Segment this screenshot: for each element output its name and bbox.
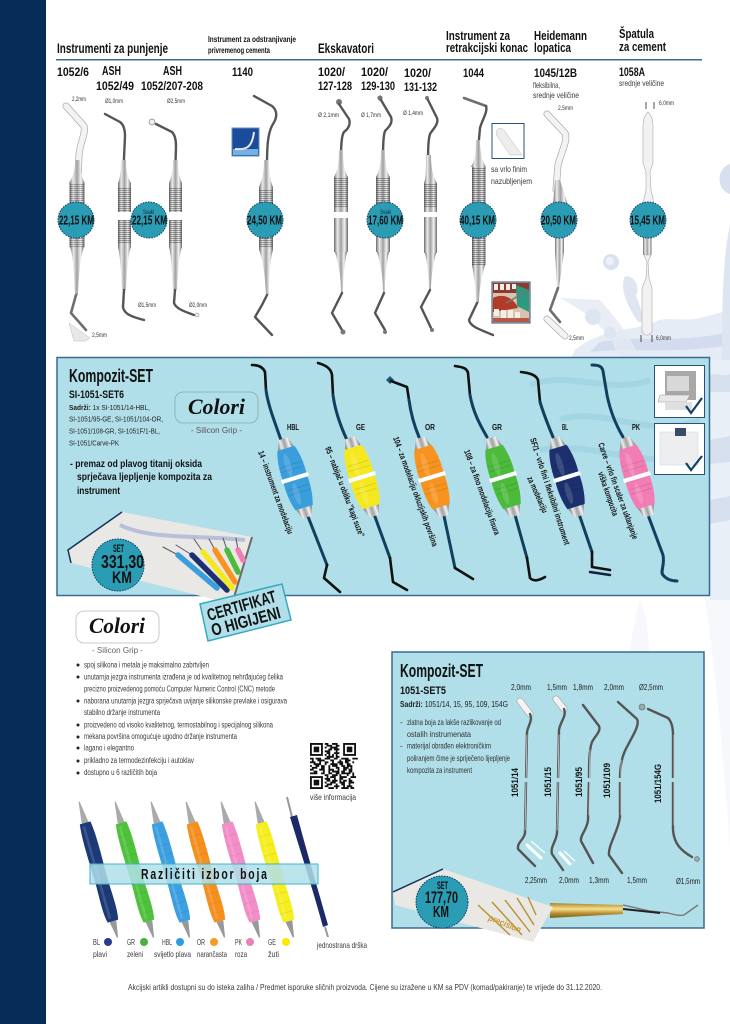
product codes: 127-128 bbox=[318, 79, 352, 93]
dimension labels: 6,0mm bbox=[656, 336, 671, 342]
instrument 1045/12B bbox=[547, 114, 568, 336]
header: Instrument za retrakcijski konac: retrakcijski konac bbox=[446, 40, 528, 55]
inset: dental photo bbox=[492, 282, 530, 323]
dimension labels: Ø2,5mm bbox=[167, 99, 185, 105]
set price badge 177,70 KM bbox=[416, 876, 468, 928]
tip sizes bbox=[511, 682, 700, 886]
colour legend bbox=[93, 937, 367, 959]
colour legend: PK bbox=[235, 937, 242, 947]
price badge 40,15 KM: 40,15 KM bbox=[460, 214, 495, 228]
header: Instrument za odstranjivanje privremenog cementa: Instrument za odstranjivanje bbox=[208, 35, 296, 44]
colour legend: OR bbox=[197, 937, 205, 947]
vertical codes: 1051/109 bbox=[602, 763, 613, 798]
instrument 1051/109 bbox=[609, 702, 638, 873]
product codes: 1052/207-208 bbox=[141, 79, 203, 93]
feature list: mekana površina omogućuje ugodno držanje instrumenta bbox=[84, 732, 237, 741]
dimension labels: Ø 1,7mm bbox=[361, 113, 381, 119]
price badge 15,45 KM: 15,45 KM bbox=[630, 214, 665, 228]
header: Instrument za retrakcijski konac: Instrument za bbox=[446, 28, 511, 43]
rotated captions bbox=[256, 435, 640, 548]
product codes: 131-132 bbox=[404, 80, 437, 94]
feature list: stabilno držanje instrumenta bbox=[84, 708, 160, 717]
price badge 15,45 KM bbox=[630, 202, 666, 238]
vertical codes: 1051/154G bbox=[653, 764, 664, 803]
set price badge 331,30 KM: SET bbox=[113, 543, 124, 555]
Colori logo lower: - Silicon Grip - bbox=[92, 646, 143, 655]
price badge 24,50 KM bbox=[247, 202, 283, 238]
notes: kompozita za instrument bbox=[407, 766, 473, 775]
set price badge 331,30 KM: KM bbox=[112, 568, 132, 587]
instrument 1058A spatula bbox=[642, 112, 654, 335]
coating note: - premaz od plavog titanij oksida bbox=[70, 458, 202, 470]
contents bbox=[69, 403, 163, 448]
instrument 1052/207-208 bbox=[149, 119, 199, 317]
header: Špatula za cement: za cement bbox=[619, 39, 666, 54]
instrument OR bbox=[387, 377, 473, 579]
vertical codes: 1051/95 bbox=[574, 766, 585, 797]
contents: SI-1051/95-GE, SI-1051/104-OR, bbox=[69, 414, 163, 424]
gold instrument bbox=[550, 903, 698, 918]
text: sa vrlo finim nazubljenjem: sa vrlo finim bbox=[491, 164, 527, 174]
product codes: srednje veličine bbox=[619, 78, 664, 88]
rotated captions: 14 – instrument za modelaciju bbox=[256, 449, 296, 535]
tip sizes: 2,0mm bbox=[511, 682, 531, 692]
heading: Kompozit-SET bbox=[69, 365, 153, 386]
price badge 22,15 KM bbox=[58, 202, 94, 238]
price badge 40,15 KM bbox=[460, 202, 496, 238]
coating note: sprječava ljepljenje kompozita za bbox=[77, 471, 212, 483]
price badge svaki 22,15 KM: Svaki bbox=[143, 210, 154, 216]
dimension labels: 2,5mm bbox=[569, 336, 584, 342]
heading: Kompozit-SET bbox=[400, 660, 483, 681]
banner: Različiti izbor boja bbox=[90, 864, 318, 884]
instrument 1020/131-132 bbox=[421, 96, 440, 332]
stamp: Certifikat o higijeni bbox=[200, 584, 291, 641]
tip sizes: Ø1,5mm bbox=[676, 876, 700, 886]
tip sizes: 1,5mm bbox=[627, 875, 647, 885]
rotated captions: za modelaciju bbox=[525, 475, 550, 514]
tip sizes: 1,3mm bbox=[589, 875, 609, 885]
header: Heidemann lopatica: lopatica bbox=[534, 40, 572, 55]
contents: Sadrži: 1051/14, 15, 95, 109, 154G bbox=[400, 700, 508, 709]
tip sizes: Ø2,5mm bbox=[639, 682, 663, 692]
notes: - bbox=[400, 718, 403, 727]
instrument 1052/6 bbox=[66, 106, 90, 341]
instrument OR: OR bbox=[425, 423, 435, 432]
instrument PK bbox=[592, 365, 677, 581]
header: Špatula za cement bbox=[619, 26, 666, 54]
product codes: 1044 bbox=[463, 66, 484, 80]
dimension labels: Ø 1,4mm bbox=[403, 111, 423, 117]
instrument 1051/15 bbox=[552, 699, 575, 870]
instrument 1051/95 bbox=[581, 705, 599, 863]
instrument HBL: HBL bbox=[287, 423, 299, 432]
rotated captions: viška kompozita bbox=[596, 470, 621, 517]
instrument 1020/127-128 bbox=[331, 99, 351, 334]
sidebar bbox=[0, 0, 46, 1024]
price badge svaki 17,60 KM bbox=[367, 202, 403, 238]
product codes: 129-130 bbox=[361, 79, 395, 93]
background water splash bbox=[560, 164, 730, 880]
colour legend: GE bbox=[268, 937, 276, 947]
vertical codes bbox=[510, 763, 664, 803]
feature list: lagano i elegantno bbox=[84, 744, 134, 752]
product codes: 1020/ bbox=[404, 66, 432, 80]
header: Heidemann lopatica: Heidemann bbox=[534, 28, 587, 43]
feature list: spoj silikona i metala je maksimalno zabrtvljen bbox=[84, 660, 209, 670]
banner: Različiti izbor boja: Različiti izbor boja bbox=[141, 866, 268, 882]
Colori logo: - Silicon Grip - bbox=[191, 426, 242, 435]
dimension labels bbox=[72, 97, 674, 342]
feature list: unutarnja jezgra instrumenta izrađena je od kvalitetnog nehrđajućeg čelika bbox=[84, 672, 283, 682]
dimension labels: Ø2,0mm bbox=[189, 303, 207, 309]
tip sizes: 2,25mm bbox=[525, 875, 547, 885]
product codes: 1140 bbox=[232, 65, 253, 79]
rotated captions: 108 – za fino modelaciju fisura bbox=[462, 448, 502, 536]
vertical codes: 1051/14 bbox=[510, 767, 521, 797]
header: Heidemann lopatica bbox=[534, 28, 587, 55]
instrument 1052/49 bbox=[105, 114, 144, 320]
product codes: 1020/ bbox=[361, 65, 389, 79]
instrument GE: GE bbox=[356, 423, 366, 432]
feature list: proizvedeno od visoko kvalitetnog, termostabilnog i specijalnog silikona bbox=[84, 720, 273, 730]
set price badge 331,30 KM bbox=[92, 539, 144, 591]
inset: tip detail bbox=[492, 124, 524, 158]
panel: Kompozit-SET SI-1051-SET6 bbox=[57, 358, 710, 596]
feature list: precizno proizvedenog pomoću Computer Numeric Control (CNC) metode bbox=[84, 684, 275, 694]
product box set 5 bbox=[393, 869, 553, 942]
product codes: 1020/ bbox=[318, 65, 346, 79]
instrument 1051/154G bbox=[639, 704, 699, 861]
header: Instrument za odstranjivanje privremenog cementa bbox=[208, 35, 296, 55]
feature list: prikladno za termodezinfekciju i autoklav bbox=[84, 756, 194, 765]
price badge 22,15 KM: 22,15 KM bbox=[59, 214, 94, 228]
product codes: 1052/6 bbox=[57, 65, 89, 79]
coating note bbox=[70, 458, 212, 497]
icon: blue working tip photo bbox=[232, 128, 259, 156]
notes: - bbox=[400, 742, 403, 750]
price badge svaki 22,15 KM bbox=[131, 202, 167, 238]
stamp: Certifikat o higijeni: CERTIFIKAT bbox=[205, 587, 279, 625]
colour legend: BL bbox=[93, 937, 100, 947]
instrument GE bbox=[318, 363, 407, 590]
price badges bbox=[58, 202, 666, 238]
instrument 1140 bbox=[254, 96, 276, 335]
colour legend: zeleni bbox=[127, 949, 143, 959]
instrument HBL bbox=[252, 365, 340, 592]
dimension labels: Ø 2,1mm bbox=[318, 113, 339, 119]
colour legend: plavi bbox=[93, 949, 107, 959]
notes: materijal obrađen elektroničkim bbox=[407, 742, 491, 750]
product codes: 1058A bbox=[619, 65, 645, 79]
instrument 1044 bbox=[464, 98, 493, 335]
tip sizes: 2,0mm bbox=[559, 875, 579, 885]
header: Instrumenti za punjenje: Instrumenti za punjenje bbox=[57, 40, 168, 56]
set price badge 177,70 KM: 177,70 bbox=[425, 888, 458, 907]
header: Instrument za odstranjivanje privremenog cementa: privremenog cementa bbox=[208, 46, 270, 55]
text: sa vrlo finim nazubljenjem bbox=[491, 164, 532, 186]
Colori logo bbox=[175, 392, 258, 435]
price badge 20,50 KM: 20,50 KM bbox=[541, 214, 576, 228]
set code: 1051-SET5 bbox=[400, 685, 446, 697]
header: Instrument za retrakcijski konac bbox=[446, 28, 528, 55]
icon: autoclave bbox=[654, 424, 704, 474]
tip sizes: 1,8mm bbox=[573, 682, 593, 692]
feature list bbox=[78, 660, 287, 777]
colour legend: narančasta bbox=[197, 949, 227, 959]
contents: Sadrži: 1x SI-1051/14-HBL, bbox=[69, 403, 150, 412]
text: sa vrlo finim nazubljenjem: nazubljenjem bbox=[491, 176, 532, 186]
product box set 5: precision bbox=[486, 912, 523, 935]
price badge svaki 17,60 KM: 17,60 KM bbox=[368, 214, 403, 228]
dimension labels: Ø1,0mm bbox=[105, 99, 123, 105]
QR code bbox=[310, 743, 358, 802]
colour legend: HBL bbox=[162, 937, 172, 947]
price badge svaki 22,15 KM: 22,15 KM bbox=[132, 214, 167, 228]
colour legend: GR bbox=[127, 937, 135, 947]
rotated captions: 95 – nabijač u obliku "kapi suze" bbox=[323, 445, 367, 538]
set price badge 331,30 KM: 331,30 bbox=[101, 552, 144, 572]
icon: thermodisinfector bbox=[654, 366, 704, 418]
notes: ostalih instrumenata bbox=[407, 730, 471, 739]
price badge 20,50 KM bbox=[541, 202, 577, 238]
dimension labels: Ø1,5mm bbox=[138, 303, 156, 309]
Colori logo: Colori bbox=[188, 394, 246, 419]
dimension labels: 2,5mm bbox=[92, 333, 107, 339]
colour legend: jednostrana drška bbox=[316, 940, 367, 950]
set price badge 177,70 KM: SET bbox=[437, 880, 448, 892]
product codes: ASH bbox=[163, 64, 182, 78]
instrument 1051/14 bbox=[518, 701, 545, 866]
set code: SI-1051-SET6 bbox=[69, 389, 124, 401]
notes bbox=[400, 718, 510, 775]
instrument BL bbox=[521, 372, 610, 575]
mini instruments bbox=[163, 538, 243, 590]
tip sizes: 2,0mm bbox=[604, 682, 624, 692]
instrument GR: GR bbox=[492, 423, 502, 432]
product codes: 1045/12B bbox=[534, 66, 577, 80]
rotated captions: 104 – za modelaciju okluzijskih površina bbox=[391, 435, 440, 548]
notes: zlatna boja za lakše razlikovanje od bbox=[407, 718, 501, 727]
instrument GR bbox=[455, 366, 545, 580]
product codes bbox=[57, 64, 664, 100]
product codes: srednje veličine bbox=[533, 90, 579, 100]
product box set 6 bbox=[68, 512, 252, 604]
dimension labels: 6,0mm bbox=[659, 101, 674, 107]
instrument PK: PK bbox=[632, 423, 640, 432]
rotated captions: Carve – vrlo fin scaler za uklanjanje bbox=[596, 441, 640, 541]
header: Špatula za cement: Špatula bbox=[619, 26, 655, 41]
dimension labels: 2,5mm bbox=[558, 106, 573, 112]
colour legend: svijetlo plava bbox=[154, 949, 191, 959]
dimension labels: 2,2mm bbox=[72, 97, 86, 103]
stamp: Certifikat o higijeni: O HIGIJENI bbox=[209, 603, 283, 640]
colour legend: žuti bbox=[268, 949, 279, 959]
coating note: instrument bbox=[77, 485, 120, 497]
colour handles bbox=[72, 797, 328, 939]
colour legend: roza bbox=[235, 949, 247, 959]
price badge 24,50 KM: 24,50 KM bbox=[247, 214, 282, 228]
tip sizes: 1,5mm bbox=[547, 682, 567, 692]
feature list: naborana unutarnja jezgra sprječava uvijanje silikonske prevlake i osigurava bbox=[84, 696, 287, 706]
contents: SI-1051/Carve-PK bbox=[69, 438, 119, 448]
contents: SI-1051/108-GR, SI-1051F/1-BL, bbox=[69, 426, 160, 436]
panel: Kompozit-SET 1051-SET5 bbox=[392, 652, 704, 928]
price badge svaki 17,60 KM: Svaki bbox=[380, 210, 391, 216]
vertical codes: 1051/15 bbox=[543, 766, 554, 797]
instrument 1020/129-130 bbox=[375, 95, 392, 334]
product codes: fleksibilna, bbox=[533, 80, 560, 90]
rotated captions: SF/1 – vrlo fini i fleksibilni instrument bbox=[528, 437, 572, 546]
Colori logo lower bbox=[76, 611, 159, 655]
product codes: ASH bbox=[102, 64, 121, 78]
set price badge 177,70 KM: KM bbox=[433, 904, 449, 921]
single-ended handle bbox=[287, 797, 328, 937]
instrument BL: BL bbox=[562, 423, 568, 432]
feature list: dostupno u 6 različitih boja bbox=[84, 768, 157, 777]
header: Ekskavatori: Ekskavatori bbox=[318, 40, 374, 56]
Colori logo lower: Colori bbox=[89, 613, 146, 638]
product codes: 1052/49 bbox=[96, 79, 134, 93]
QR code: više informacija bbox=[310, 792, 356, 802]
notes: poliranjem čime je spriječeno lijepljenje bbox=[407, 754, 510, 763]
footer note: Akcijski artikli dostupni su do isteka zaliha / Predmet isporuke sličnih proizvoda. Cijene su izražene u KM sa PDV (komad/pakiranje) te vrijede do 31.12.2020. bbox=[128, 982, 602, 992]
